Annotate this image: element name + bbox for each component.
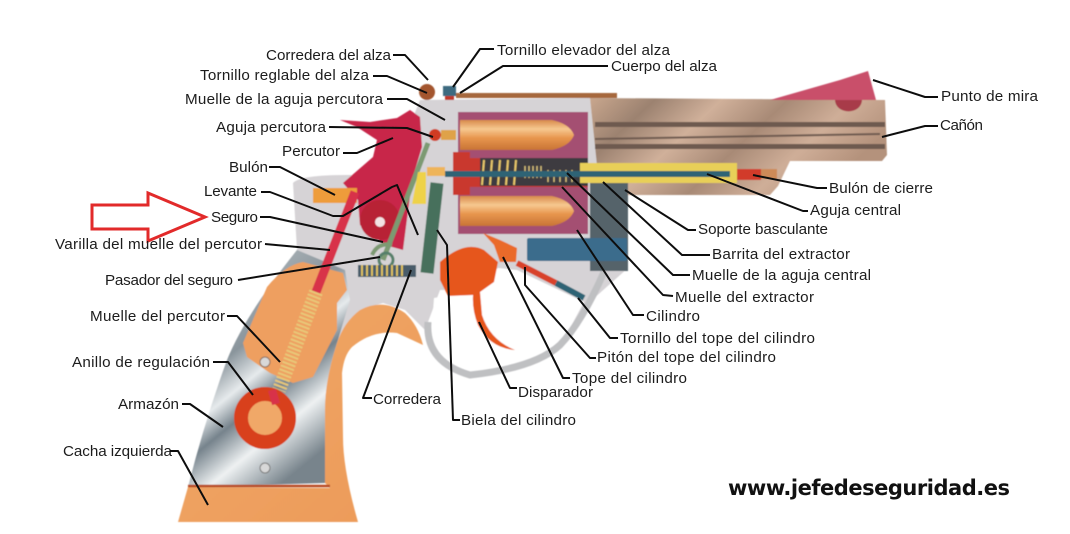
label: Cañón xyxy=(882,117,983,137)
hammer spring rod xyxy=(316,192,355,292)
trigger xyxy=(440,247,515,350)
label: Corredera del alza: Corredera del alza xyxy=(266,47,392,64)
label: Aguja central xyxy=(707,174,901,219)
hammer spring xyxy=(279,292,316,390)
hammer pin xyxy=(375,217,385,227)
frame screws xyxy=(260,357,270,473)
label: Muelle de la aguja central xyxy=(567,173,871,284)
label: Pitón del tope del cilindro: Pitón del tope del cilindro xyxy=(597,349,776,366)
label: Biela del cilindro: Biela del cilindro xyxy=(461,412,576,429)
label: Cilindro: Cilindro xyxy=(646,308,700,325)
label: Corredera del alza xyxy=(266,47,428,80)
revolver illustration xyxy=(178,71,887,522)
frame upper body xyxy=(293,98,628,410)
label: Muelle de la aguja central: Muelle de la aguja central xyxy=(692,267,871,284)
label: Disparador: Disparador xyxy=(518,384,593,401)
top strap xyxy=(456,93,617,98)
website credit: www.jefedeseguridad.es xyxy=(728,476,1010,500)
label: Muelle del extractor xyxy=(562,187,814,306)
label: Corredera: Corredera xyxy=(373,391,442,408)
label: Bulón: Bulón xyxy=(229,159,268,176)
trigger guard opening xyxy=(432,268,584,372)
label: Tornillo del tope del cilindro xyxy=(578,298,815,347)
stop rod xyxy=(517,263,584,298)
ring pin xyxy=(272,390,276,404)
label: Punto de mira xyxy=(873,80,1039,105)
barrel bore lines xyxy=(595,122,885,149)
label: Anillo de regulación: Anillo de regulación xyxy=(72,354,210,371)
label: Seguro: Seguro xyxy=(211,209,258,226)
label: Tope del cilindro: Tope del cilindro xyxy=(572,370,687,387)
barrel xyxy=(590,98,887,195)
grip frame steel xyxy=(188,250,350,487)
red arrow pointing at Seguro xyxy=(92,193,205,241)
label: Barrita del extractor: Barrita del extractor xyxy=(712,246,850,263)
label: Armazón: Armazón xyxy=(118,396,179,413)
label: Aguja percutora: Aguja percutora xyxy=(216,119,327,136)
label: Pasador del seguro: Pasador del seguro xyxy=(105,272,233,289)
bolt xyxy=(313,188,357,203)
front sight pin xyxy=(835,100,862,111)
label: Bulón xyxy=(229,159,335,195)
label: Cilindro xyxy=(577,230,700,325)
label: Cuerpo del alza xyxy=(460,58,718,93)
trigger guard xyxy=(428,272,604,375)
label: Percutor: Percutor xyxy=(282,143,340,160)
label: Pasador del seguro xyxy=(105,257,380,289)
cylinder stop xyxy=(483,233,517,262)
label: Biela del cilindro xyxy=(437,230,576,429)
label: Corredera xyxy=(363,270,442,408)
label: Aguja percutora xyxy=(216,119,433,137)
hammer xyxy=(340,110,422,250)
rear sight xyxy=(419,84,456,100)
label: Disparador xyxy=(479,322,593,401)
ejector rod xyxy=(527,238,627,261)
label: Muelle de la aguja percutora: Muelle de la aguja percutora xyxy=(185,91,384,108)
label: Cañón: Cañón xyxy=(940,117,983,134)
label: Barrita del extractor xyxy=(603,182,850,263)
label: Armazón xyxy=(118,396,223,427)
cylinder xyxy=(458,112,588,234)
label: Cuerpo del alza: Cuerpo del alza xyxy=(611,58,718,75)
label: Tornillo del tope del cilindro: Tornillo del tope del cilindro xyxy=(620,330,815,347)
label: Anillo de regulación xyxy=(72,354,253,395)
safety spring xyxy=(358,265,416,277)
label: Seguro xyxy=(211,209,383,242)
label: Muelle del percutor xyxy=(90,308,280,362)
label: Soporte basculante xyxy=(625,190,828,238)
front sight xyxy=(770,71,876,100)
label: Tope del cilindro xyxy=(503,257,687,387)
label: Bulón de cierre: Bulón de cierre xyxy=(829,180,933,197)
inner wood panel xyxy=(243,262,347,383)
adjustment ring xyxy=(241,394,289,442)
label: Bulón de cierre xyxy=(753,175,933,197)
label: Cacha izquierda: Cacha izquierda xyxy=(63,443,173,460)
label: Pitón del tope del cilindro xyxy=(525,267,776,366)
label: Tornillo reglable del alza: Tornillo reglable del alza xyxy=(200,67,370,84)
label: Tornillo elevador del alza xyxy=(453,42,671,87)
label: Muelle del percutor: Muelle del percutor xyxy=(90,308,225,325)
label: Tornillo elevador del alza: Tornillo elevador del alza xyxy=(497,42,671,59)
label: Muelle del extractor: Muelle del extractor xyxy=(675,289,814,306)
label: Tornillo reglable del alza xyxy=(200,67,427,93)
label: Cacha izquierda xyxy=(63,443,208,505)
firing pin and spring xyxy=(429,129,456,141)
label: Percutor xyxy=(282,138,393,160)
safety levers xyxy=(372,143,437,273)
label: Aguja central: Aguja central xyxy=(810,202,901,219)
cartridges xyxy=(460,120,574,226)
label: Muelle de la aguja percutora xyxy=(185,91,445,120)
grip wood xyxy=(178,305,423,522)
label: Levante xyxy=(204,183,418,235)
label: Soporte basculante: Soporte basculante xyxy=(698,221,828,238)
extractor assembly xyxy=(427,152,777,195)
label: Varilla del muelle del percutor: Varilla del muelle del percutor xyxy=(55,236,262,253)
label: Levante: Levante xyxy=(204,183,257,200)
label: Punto de mira: Punto de mira xyxy=(941,88,1039,105)
